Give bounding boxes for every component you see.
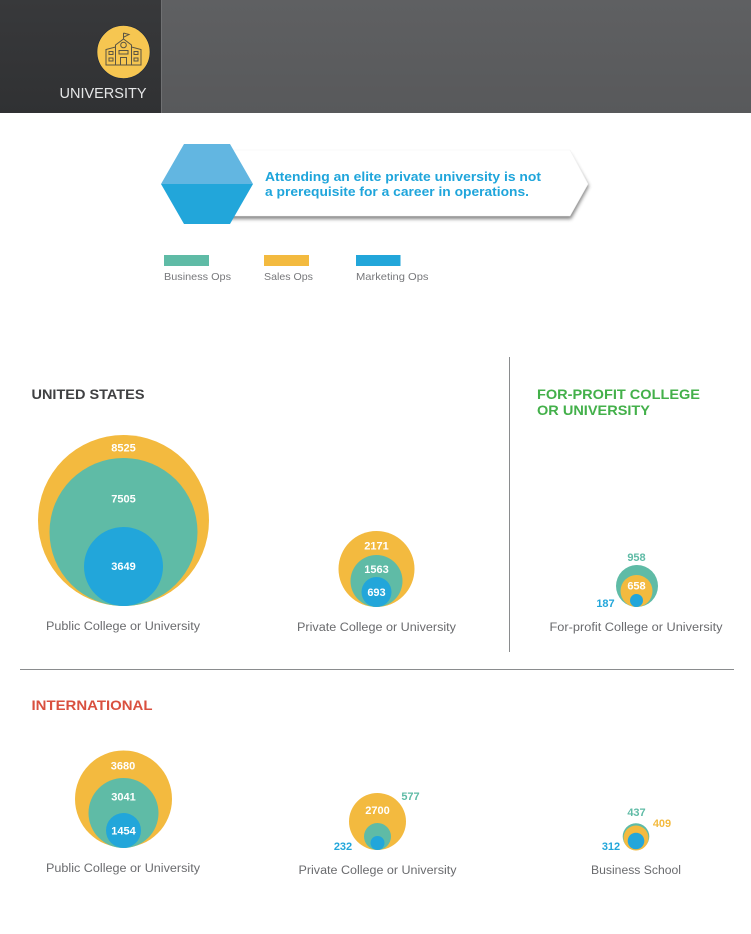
callout text: Attending an elite private university is not (265, 169, 542, 184)
heading: For-profit: FOR-PROFIT COLLEGE (537, 386, 700, 402)
chart: international public college: Public College or University (46, 863, 200, 875)
chart: for-profit college: 187 (596, 598, 615, 610)
chart: for-profit college (550, 552, 723, 634)
chart: international public college: 3041 (111, 792, 136, 804)
chart: international private college: Private College or University (298, 865, 457, 877)
legend (164, 255, 428, 283)
chart: US public college: Public College or University (46, 621, 200, 633)
legend: sales ops (264, 255, 313, 283)
chart: US public college: 3649 (111, 561, 136, 573)
chart: business school: 409 (653, 818, 671, 830)
chart: international public college (46, 750, 200, 875)
chart: international private college: 2700 (365, 805, 390, 817)
legend: marketing ops: Marketing Ops (356, 271, 428, 283)
legend: business ops: Business Ops (164, 271, 231, 283)
chart: business school: 437 (627, 807, 646, 819)
legend: marketing ops (356, 255, 428, 283)
callout text: a prerequisite for a career in operations. (265, 184, 529, 199)
chart: US public college: 8525 (111, 442, 136, 454)
chart: US private college: 1563 (364, 564, 389, 576)
chart: international public college: 3680 (111, 760, 135, 772)
chart: business school: Business School (591, 865, 681, 877)
heading: For-profit: OR UNIVERSITY (537, 402, 651, 418)
header label: UNIVERSITY (60, 86, 147, 102)
chart: for-profit college: 958 (627, 552, 646, 564)
chart: international private college: 577 (401, 791, 420, 803)
heading: United States: UNITED STATES (32, 386, 144, 402)
chart: US public college (38, 435, 209, 633)
chart: US private college: 693 (367, 587, 386, 599)
chart: international public college: 1454 (111, 826, 137, 838)
chart: international private college (298, 791, 457, 877)
hexagon icon (161, 144, 253, 224)
chart: for-profit college: 658 (627, 580, 646, 592)
chart: international private college: 232 (334, 841, 352, 853)
legend: business ops (164, 255, 231, 283)
chart: US private college (297, 531, 456, 634)
chart: US public college: 7505 (111, 494, 136, 506)
chart: for-profit college: For-profit College or University (550, 622, 723, 634)
chart: US private college: 2171 (364, 540, 389, 552)
chart: business school (591, 807, 681, 877)
icon: school building on yellow circle (97, 26, 150, 78)
legend: sales ops: Sales Ops (264, 271, 313, 283)
callout: key takeaway arrow with hexagon (161, 144, 589, 224)
chart: business school: 312 (602, 841, 620, 853)
chart: US private college: Private College or University (297, 622, 456, 634)
heading: International: INTERNATIONAL (32, 697, 153, 713)
header band (0, 0, 751, 113)
